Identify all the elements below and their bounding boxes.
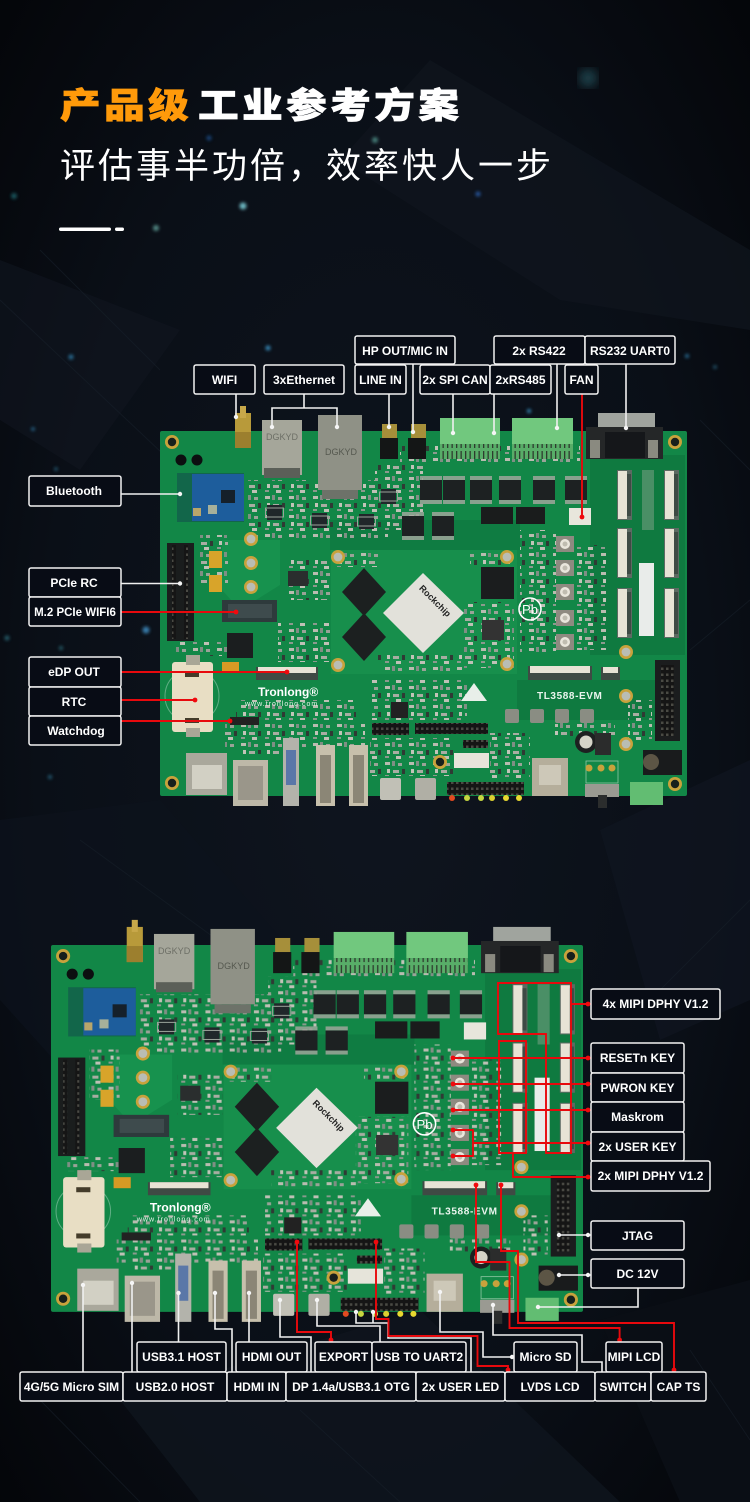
callout: HDMI IN: HDMI IN: [234, 1380, 280, 1394]
callout: MIPI LCD: [474, 1183, 662, 1372]
callout: Bluetooth: [29, 476, 182, 506]
board 1: [160, 406, 687, 808]
callout: DC 12V: DC 12V: [616, 1267, 659, 1281]
title: white part: 工业参考方案: [198, 77, 462, 128]
callout: RTC: RTC: [62, 695, 87, 709]
callout: RESETn KEY: [451, 1043, 684, 1073]
callout: Watchdog: Watchdog: [47, 724, 105, 738]
callout: CAP TS: [499, 1183, 706, 1401]
callout: SWITCH: [491, 1303, 651, 1401]
callout: 2x SPI CAN: 2x SPI CAN: [422, 373, 488, 387]
callout: USB TO UART2: [315, 1298, 466, 1372]
callout: eDP OUT: [29, 657, 289, 687]
callout: 3xEthernet: 3xEthernet: [273, 373, 335, 387]
callout: PCIe RC: PCIe RC: [50, 576, 98, 590]
callout: HP OUT/MIC IN: HP OUT/MIC IN: [362, 344, 448, 358]
callout: PWRON KEY: PWRON KEY: [600, 1081, 675, 1095]
callout: Bluetooth: Bluetooth: [46, 484, 102, 498]
callout: USB2.0 HOST: [123, 1281, 227, 1401]
board 2: [51, 920, 583, 1324]
callout: HDMI OUT: [236, 1291, 307, 1372]
callout: 2x USER LED: 2x USER LED: [422, 1380, 500, 1394]
subtitle: 评估事半功倍，效率快人一步: [60, 138, 554, 189]
callout: 4G/5G Micro SIM: [20, 1283, 123, 1401]
callout: EXPORT: [295, 1240, 372, 1372]
callout: 2x MIPI DPHY V1.2: 2x MIPI DPHY V1.2: [598, 1169, 704, 1183]
callout: DC 12V: [536, 1259, 684, 1309]
glowing dots: [4, 136, 717, 779]
callout: PCIe RC: [29, 568, 182, 597]
callout: RESETn KEY: RESETn KEY: [600, 1051, 675, 1065]
callout: 2x RS422: 2x RS422: [512, 344, 566, 358]
callout: 4G/5G Micro SIM: 4G/5G Micro SIM: [24, 1380, 119, 1394]
callout: MIPI LCD: MIPI LCD: [608, 1350, 661, 1364]
callout: RS232 UART0: RS232 UART0: [590, 344, 670, 358]
callout: USB2.0 HOST: USB2.0 HOST: [136, 1380, 215, 1394]
callout: LINE IN: [355, 365, 406, 429]
callout: 2xRS485: 2xRS485: [495, 373, 546, 387]
callout: FAN: FAN: [570, 373, 594, 387]
callout: 2x SPI CAN: [420, 365, 490, 435]
callout: DP 1.4a/USB3.1 OTG: DP 1.4a/USB3.1 OTG: [292, 1380, 410, 1394]
callout: JTAG: JTAG: [622, 1229, 653, 1243]
large teal glow: [579, 69, 597, 87]
callout: 2x RS422: [494, 336, 585, 430]
callout: 2x USER KEY: 2x USER KEY: [598, 1140, 677, 1154]
callout: M.2 PCIe WIFI6: M.2 PCIe WIFI6: [34, 607, 116, 619]
callout: Watchdog: [29, 716, 232, 745]
callout: Micro SD: [438, 1290, 577, 1372]
accent dash: [59, 228, 124, 231]
callout: PWRON KEY: [451, 1073, 684, 1102]
callout: RTC: [29, 687, 197, 716]
callout: WIFI: [194, 365, 255, 419]
callout: LVDS LCD: LVDS LCD: [520, 1380, 580, 1394]
callout: USB3.1 HOST: USB3.1 HOST: [142, 1350, 222, 1364]
callout: 3xEthernet: [264, 365, 344, 429]
callout: M.2 PCIe WIFI6: [29, 597, 238, 626]
callout: CAP TS: CAP TS: [657, 1380, 700, 1394]
callout: HDMI IN: [213, 1291, 286, 1401]
callout: 2xRS485: [490, 365, 551, 435]
callout: LINE IN: LINE IN: [359, 373, 402, 387]
callout: FAN: [565, 365, 598, 519]
callout: Maskrom: Maskrom: [611, 1110, 664, 1124]
callout: USB TO UART2: USB TO UART2: [375, 1350, 464, 1364]
callout: 2x USER LED: [354, 1310, 505, 1401]
callout: 4x MIPI DPHY V1.2: [571, 989, 720, 1019]
title: [60, 77, 462, 128]
callout: LVDS LCD: [374, 1240, 595, 1401]
callout: 2x USER KEY: [451, 1128, 684, 1161]
callout: EXPORT: EXPORT: [319, 1350, 369, 1364]
callout: Maskrom: [451, 1102, 684, 1132]
callout: Micro SD: Micro SD: [519, 1350, 572, 1364]
title: orange part: 产品级: [60, 77, 192, 128]
callout: RS232 UART0: [585, 336, 675, 430]
callout: SWITCH: SWITCH: [599, 1380, 647, 1394]
callout: JTAG: [557, 1221, 684, 1250]
callout: WIFI: WIFI: [212, 373, 237, 387]
callout: HP OUT/MIC IN: [355, 336, 455, 434]
callout: DP 1.4a/USB3.1 OTG: [278, 1298, 416, 1401]
red highlight frames: MIPI connectors: [498, 983, 571, 1153]
callout: eDP OUT: eDP OUT: [48, 665, 101, 679]
callout: HDMI OUT: HDMI OUT: [242, 1350, 302, 1364]
callout: 4x MIPI DPHY V1.2: 4x MIPI DPHY V1.2: [603, 997, 709, 1011]
callout: USB3.1 HOST: [137, 1291, 226, 1372]
callout: 2x MIPI DPHY V1.2: [513, 1153, 710, 1191]
